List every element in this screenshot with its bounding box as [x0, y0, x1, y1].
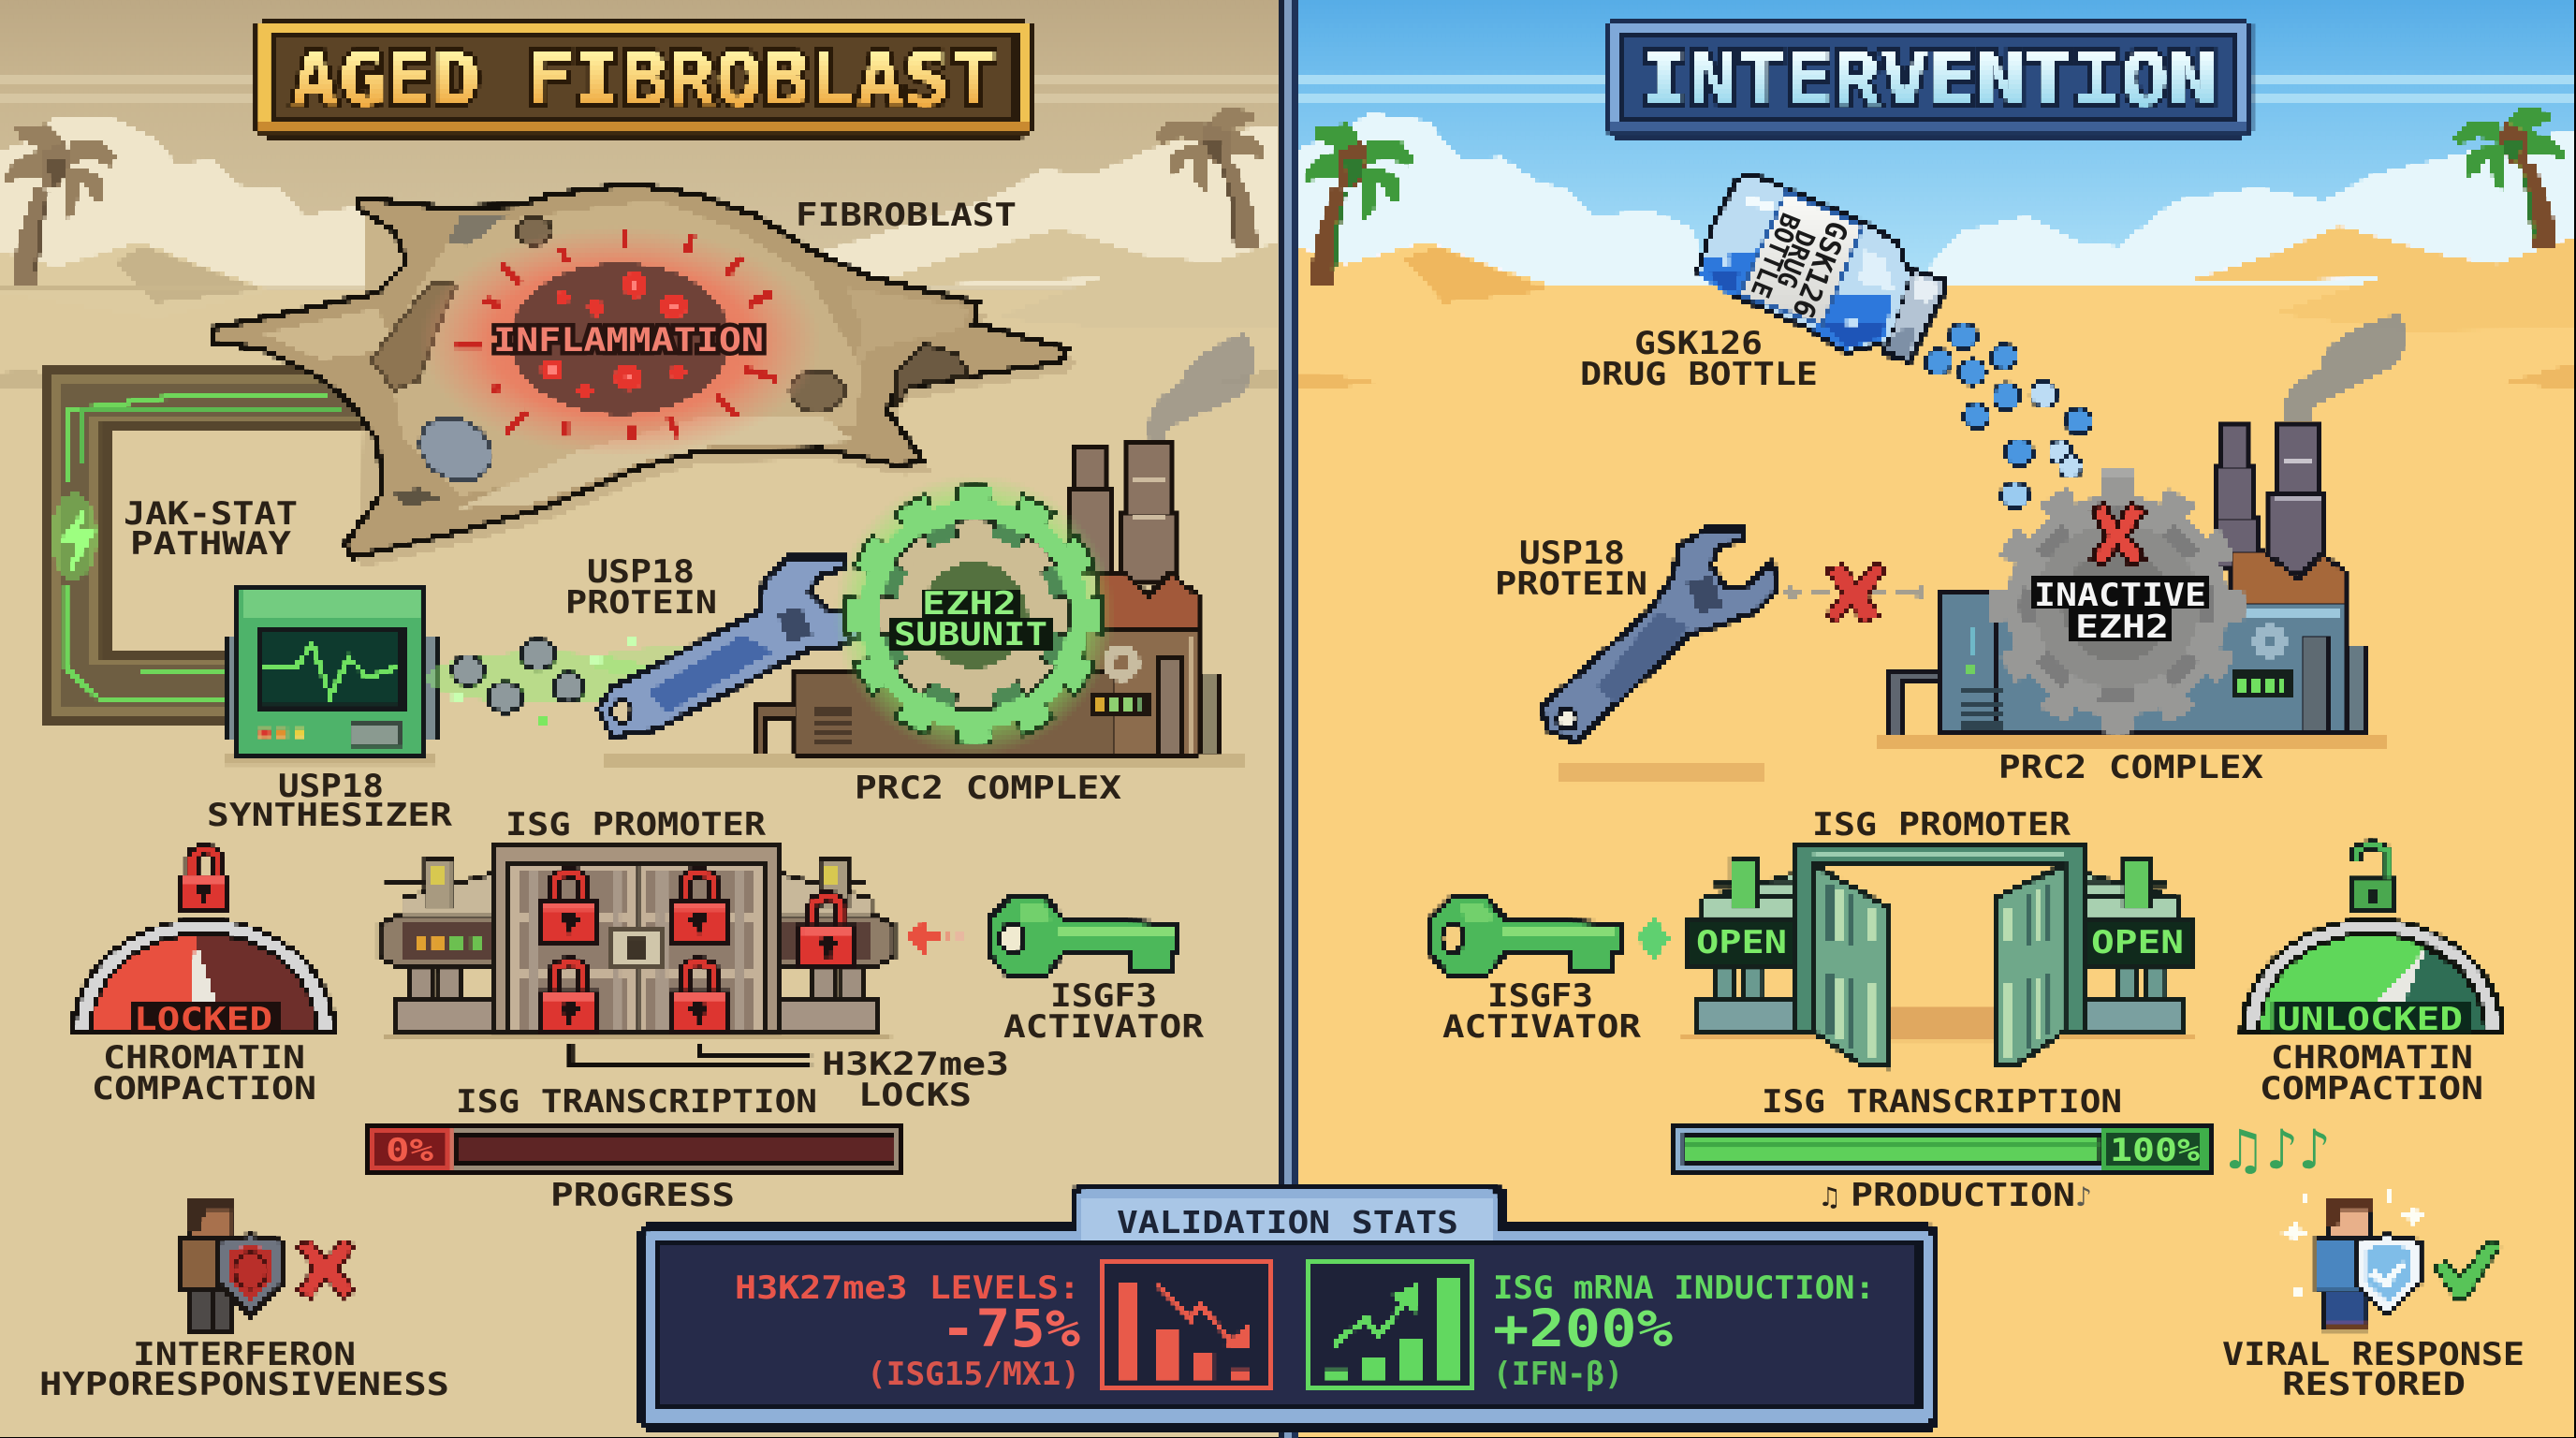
label: isgf3 activator left: ACTIVATOR: [1003, 1008, 1205, 1046]
label: chromatin compaction right: COMPACTION: [2260, 1070, 2483, 1108]
label: jak-stat pathway: PATHWAY: [130, 525, 292, 563]
label: h3k27me3 locks: LOCKS: [858, 1077, 972, 1114]
bottle label text: GSK126: [1785, 216, 1854, 322]
icon: falling drug droplets: [1925, 324, 2092, 508]
label: isgf3 activator right: [1442, 977, 1642, 1046]
bottle label text: BOTTLE: [1745, 209, 1806, 302]
icon: isgf3 key left: [988, 897, 1178, 977]
label: h3k27me3 locks: [822, 1046, 1009, 1114]
panel: validation stats: [638, 1183, 1939, 1432]
label: usp18 synthesizer: USP18: [278, 768, 384, 805]
label: isg transcription right: ISG TRANSCRIPTION: [1762, 1083, 2122, 1121]
icon: gsk126 drug bottle: [1697, 173, 1945, 362]
label: locked: LOCKED: [134, 1001, 272, 1038]
label: isg promoter right: ISG PROMOTER: [1812, 806, 2071, 844]
arrow: blocked activator: [905, 917, 963, 959]
icon: music notes: ♫♪♪: [2220, 1118, 2331, 1181]
label: ezh2 subunit: EZH2: [922, 585, 1017, 623]
label: usp18 protein right: PROTEIN: [1495, 565, 1647, 603]
label: isg promoter left: ISG PROMOTER: [505, 806, 767, 844]
label: prc2 complex: PRC2 COMPLEX: [855, 770, 1122, 807]
label: prc2 complex right: PRC2 COMPLEX: [1998, 749, 2264, 786]
label: production: [1818, 1177, 2092, 1214]
label: open right: OPEN: [2091, 924, 2184, 961]
icon: open isg promoter gate: [1682, 844, 2196, 1067]
stat text: isg mrna induction: [1493, 1269, 1875, 1393]
icon: locked isg promoter gate: [379, 844, 894, 1065]
icon: usp18 wrench: [598, 557, 867, 737]
center divider: [1279, 0, 1298, 1438]
label: usp18 protein right: [1495, 535, 1647, 603]
icon: isgf3 key right: [1429, 897, 1670, 977]
label: inflammation: INFLAMMATION: [493, 322, 764, 360]
label: jak-stat pathway: [124, 495, 298, 563]
icon: glowing EZH2 gear: [834, 475, 1115, 756]
label: chromatin compaction right: [2260, 1039, 2483, 1108]
icon: falling bar chart: [1103, 1263, 1271, 1390]
label: chromatin compaction left: CHROMATIN: [103, 1039, 305, 1077]
bottle label text: [1745, 209, 1854, 322]
label: unlocked: UNLOCKED: [2277, 1001, 2463, 1038]
stat text: isg mrna induction: (IFN-β): [1493, 1356, 1623, 1393]
label: open left: OPEN: [1696, 924, 1787, 961]
label: usp18 protein left: USP18: [587, 553, 695, 591]
label: production: PRODUCTION: [1851, 1177, 2075, 1214]
label: isgf3 activator right: ACTIVATOR: [1442, 1008, 1642, 1046]
label: interferon hyporesponsiveness: HYPORESPONSIVENESS: [39, 1366, 449, 1403]
progress bar: 0 percent: [366, 1123, 904, 1175]
title: INTERVENTION: INTERVENTION: [1641, 38, 2217, 123]
icon: healthy figure with blue shield: [2278, 1190, 2500, 1330]
label: viral response restored: RESTORED: [2282, 1366, 2466, 1403]
label: progress: PROGRESS: [550, 1177, 735, 1214]
label: gsk126 drug bottle: [1580, 325, 1818, 393]
label: ezh2 subunit: [894, 585, 1047, 653]
icon: inactive EZH2 gear: [2003, 468, 2232, 720]
label: usp18 synthesizer: [207, 768, 453, 834]
label: chromatin compaction left: [92, 1039, 316, 1108]
label: isgf3 activator left: ISGF3: [1050, 977, 1157, 1015]
stat text: isg mrna induction: ISG mRNA INDUCTION:: [1493, 1269, 1875, 1307]
label: production: ♫: [1818, 1181, 1841, 1212]
icon: usp18 synthesizer: [226, 588, 437, 765]
label: fibroblast: FIBROBLAST: [796, 197, 1017, 234]
title plaque: intervention: [1604, 18, 2253, 139]
icon: right factory prc2 complex: [1875, 314, 2406, 749]
label: inactive ezh2: [2034, 577, 2206, 646]
label: usp18 protein left: [565, 553, 717, 622]
label: isgf3 activator right: ISGF3: [1487, 977, 1593, 1015]
label: production: ♪: [2075, 1181, 2092, 1212]
icon: fibroblast cell: [212, 183, 1076, 567]
bottle label text: DRUG: [1770, 226, 1822, 292]
label: gsk126 drug bottle: GSK126: [1634, 325, 1763, 362]
label: chromatin compaction right: CHROMATIN: [2271, 1039, 2473, 1077]
stat text: isg mrna induction: +200%: [1493, 1299, 1673, 1358]
label: gsk126 drug bottle: DRUG BOTTLE: [1580, 356, 1818, 393]
label: usp18 protein right: USP18: [1519, 535, 1625, 572]
panel: intervention background: [1297, 0, 2576, 1438]
stat text: h3k27me3 levels: [735, 1269, 1080, 1393]
stat text: h3k27me3 levels: (ISG15/MX1): [867, 1356, 1080, 1393]
icon: locked chromatin gauge: [70, 851, 338, 1038]
label: viral response restored: VIRAL RESPONSE: [2222, 1336, 2525, 1373]
arrow: blocked interaction: [1785, 563, 1925, 623]
label: viral response restored: [2222, 1336, 2525, 1403]
label: isgf3 activator left: [1003, 977, 1205, 1046]
tab label: validation stats: VALIDATION STATS: [1117, 1204, 1458, 1240]
panel: aged fibroblast background: [0, 0, 1281, 1438]
label: 0 percent: 0%: [386, 1132, 434, 1169]
stat text: h3k27me3 levels: -75%: [941, 1299, 1080, 1358]
label: isg transcription left: ISG TRANSCRIPTION: [456, 1083, 817, 1121]
label: inactive ezh2: INACTIVE: [2034, 577, 2206, 614]
icon: unlocked chromatin gauge: [2239, 845, 2506, 1038]
icon: weak figure with red shield: [179, 1197, 355, 1331]
icon: protein particles with green glow: [427, 636, 772, 727]
label: h3k27me3 locks: H3K27me3: [822, 1046, 1009, 1083]
label: usp18 synthesizer: SYNTHESIZER: [207, 797, 453, 834]
pathway: JAK-STAT circuit frame: [43, 366, 378, 724]
title plaque: aged fibroblast: [255, 18, 1033, 139]
progress bar: 100 percent: [1670, 1118, 2331, 1181]
title: AGED FIBROBLAST: AGED FIBROBLAST: [291, 38, 998, 123]
label: 100 percent: 100%: [2110, 1132, 2201, 1169]
icon: left factory prc2 complex: [604, 332, 1254, 807]
label: jak-stat pathway: JAK-STAT: [124, 495, 298, 533]
label: usp18 protein left: PROTEIN: [565, 584, 717, 622]
label: ezh2 subunit: SUBUNIT: [894, 616, 1047, 653]
label: interferon hyporesponsiveness: [39, 1336, 449, 1403]
label: interferon hyporesponsiveness: INTERFERON: [133, 1336, 356, 1373]
icon: usp18 wrench right: [1543, 529, 1777, 784]
icon: rising bar chart: [1308, 1263, 1473, 1390]
label: chromatin compaction left: COMPACTION: [92, 1070, 316, 1108]
stat text: h3k27me3 levels: H3K27me3 LEVELS:: [735, 1269, 1080, 1307]
label: inactive ezh2: EZH2: [2075, 609, 2169, 646]
